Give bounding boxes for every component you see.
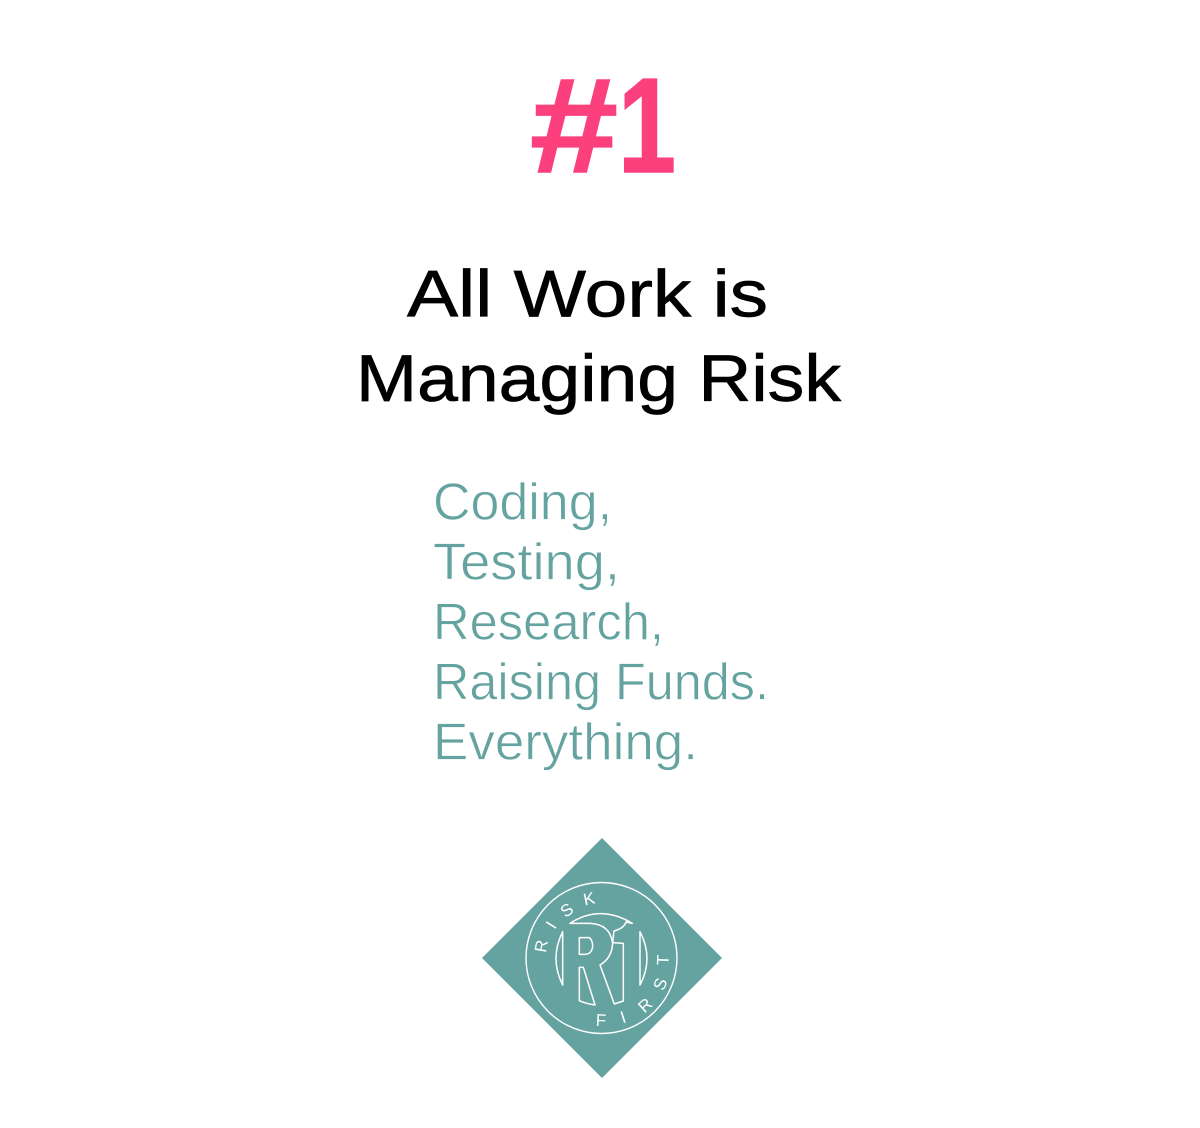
badge lettering: S [557, 899, 577, 921]
icon: R1 monogram [556, 914, 647, 1005]
badge lettering: F [595, 1011, 607, 1030]
title: Managing Risk [356, 341, 842, 415]
text block: activities list: Coding, [433, 474, 612, 532]
logo: Risk First diamond badge [482, 838, 722, 1078]
badge lettering [531, 888, 673, 1030]
heading number: #1 [530, 50, 676, 201]
badge lettering: S [650, 975, 671, 993]
title: All Work is [407, 256, 768, 330]
badge lettering: I [618, 1008, 628, 1027]
text block: activities list [433, 474, 769, 772]
text block: activities list: Testing, [433, 534, 620, 592]
badge lettering: I [542, 918, 561, 932]
badge lettering: R [634, 994, 656, 1017]
text block: activities list: Research, [433, 594, 664, 652]
text block: activities list: Everything. [433, 714, 698, 772]
badge lettering: R [531, 938, 552, 954]
title [356, 256, 842, 415]
heading number: #1: # [530, 50, 618, 201]
heading number: #1: 1 [618, 50, 676, 201]
badge lettering: T [654, 954, 673, 966]
text block: activities list: Raising Funds. [433, 654, 769, 712]
badge lettering: K [582, 888, 597, 909]
